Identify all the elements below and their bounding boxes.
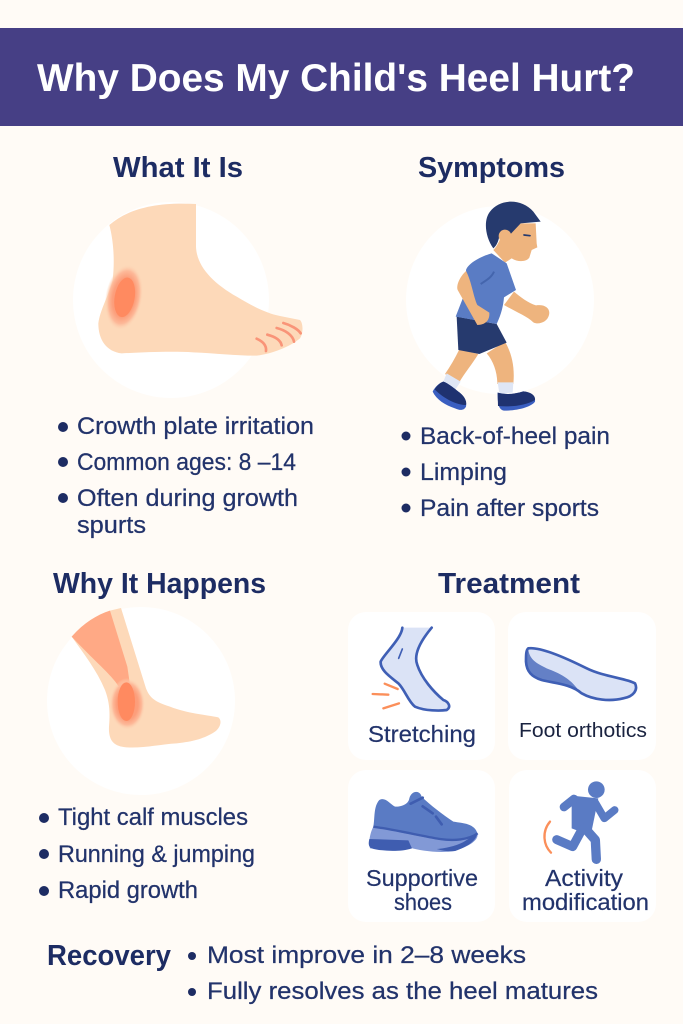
card: foot orthotics: Foot orthotics: [519, 719, 647, 742]
list: why it happens: Tight calf muscles: [58, 804, 248, 831]
heading: treatment: Treatment: [438, 568, 581, 600]
list: why it happens: Running & jumping: [58, 841, 255, 868]
card: foot orthotics: [508, 612, 656, 760]
panel: treatment: [348, 568, 656, 922]
list: what it is: [58, 413, 314, 539]
icon: runner: [544, 781, 615, 859]
illustration: limping child: [406, 202, 594, 411]
list: what it is: Often during growth: [77, 485, 298, 512]
list: symptoms: Back-of-heel pain: [420, 423, 610, 450]
list: what it is: Crowth plate irritation: [77, 413, 314, 440]
list: symptoms: Pain after sports: [420, 495, 599, 522]
list: symptoms: Limping: [420, 459, 507, 486]
panel: why it happens: [39, 568, 266, 904]
title banner: [0, 28, 683, 126]
heading: why it happens: Why It Happens: [53, 568, 266, 600]
list: recovery: [188, 942, 598, 1005]
panel: recovery: [47, 940, 598, 1005]
heading: recovery: Recovery: [47, 940, 171, 972]
panel: symptoms: [402, 152, 610, 522]
heading: symptoms: Symptoms: [418, 152, 565, 184]
list: why it happens: [39, 804, 255, 904]
card: activity modification: Activity: [545, 865, 624, 891]
list: recovery: Fully resolves as the heel matures: [207, 978, 598, 1005]
title banner: Why Does My Child's Heel Hurt?: [37, 57, 635, 100]
heading: what it is: What It Is: [113, 152, 243, 184]
icon: running shoe: [369, 792, 478, 852]
card: stretching: Stretching: [368, 721, 476, 747]
illustration: foot with sore heel: [73, 202, 302, 398]
icon: stretching foot: [373, 628, 449, 711]
list: why it happens: Rapid growth: [58, 877, 198, 904]
list: recovery: Most improve in 2–8 weeks: [207, 942, 526, 969]
card: supportive shoes: [348, 770, 495, 922]
list: symptoms: [402, 423, 610, 522]
card: stretching: [348, 612, 495, 760]
illustration: calf and heel: [47, 607, 235, 795]
card: activity modification: modification: [522, 889, 649, 915]
icon: insole: [526, 648, 636, 700]
list: what it is: Common ages: 8 –14: [77, 449, 296, 476]
card: supportive shoes: Supportive: [366, 865, 478, 891]
panel: what it is: [58, 152, 314, 539]
card: supportive shoes: shoes: [394, 889, 452, 915]
list: what it is: spurts: [77, 512, 146, 539]
card: activity modification: [509, 770, 656, 922]
